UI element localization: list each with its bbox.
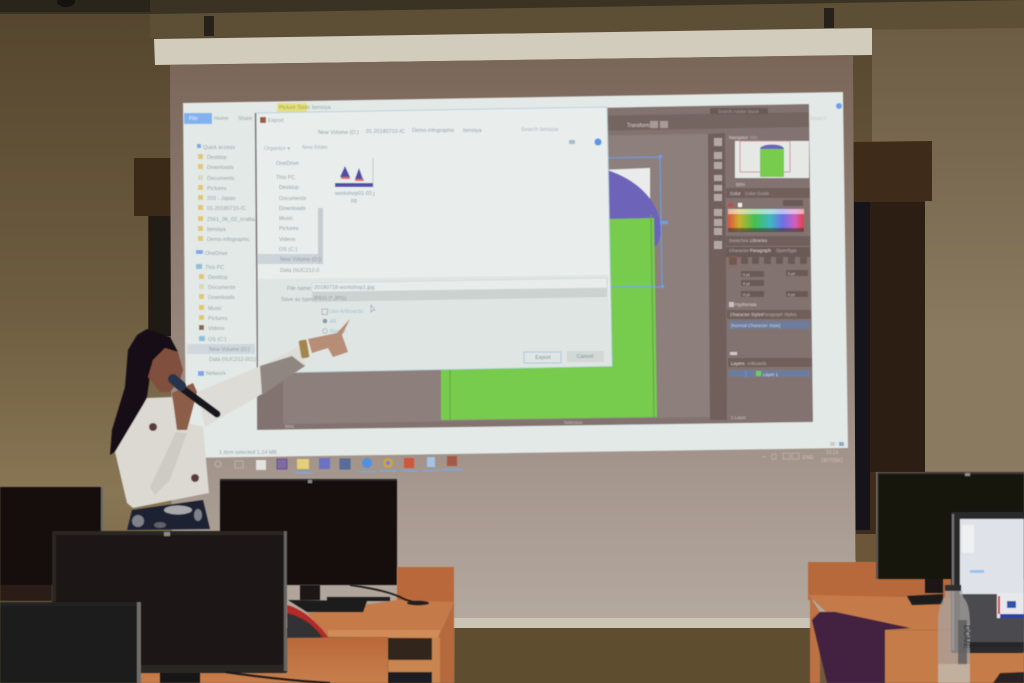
purple circle shape	[600, 168, 661, 246]
illustrator window: Info	[750, 135, 758, 140]
back center monitor	[220, 479, 397, 585]
microphone	[183, 389, 217, 414]
explorer window sidebar: Documents	[208, 285, 236, 291]
navigator panel	[735, 141, 809, 178]
sleeve arm	[197, 346, 306, 427]
export dialog: Pictures	[279, 226, 299, 232]
exported file thumbnail	[335, 158, 373, 187]
illustrator window: Swatches	[729, 238, 749, 243]
export dialog: 20180718-workshop1.jpg	[314, 285, 375, 291]
export dialog: Music	[279, 216, 293, 222]
front left monitor	[0, 602, 141, 683]
projected desktop	[183, 92, 848, 458]
illustrator window: 0 pt	[788, 292, 796, 297]
skirt	[127, 500, 210, 530]
purple chair	[812, 612, 910, 683]
projector screen housing	[154, 28, 872, 65]
illustrator window: 0 pt	[788, 271, 796, 276]
explorer window sidebar: Data (\\UC212-001)	[209, 357, 256, 363]
long dark hair	[110, 329, 178, 455]
explorer window sidebar: Network	[206, 371, 226, 377]
illustrator window: 50%	[736, 182, 745, 187]
right curtain	[853, 141, 932, 562]
explorer window sidebar: Desktop	[207, 155, 227, 161]
face	[148, 348, 183, 392]
export dialog: pg	[351, 198, 357, 204]
illustrator window: Character	[729, 248, 749, 253]
explorer window sidebar: Search	[810, 116, 827, 122]
export dialog: Cancel	[577, 354, 593, 360]
illustrator window: Libraries	[750, 238, 768, 243]
explorer window sidebar: bensiya	[207, 227, 226, 233]
red chair	[287, 605, 328, 638]
export dialog: Videos	[279, 237, 296, 243]
monitor stand, keyboard and cable	[288, 585, 429, 612]
front partition desk	[140, 637, 388, 683]
left desk with orange panel	[307, 567, 454, 683]
artboard	[600, 168, 650, 225]
tool column icons	[714, 138, 722, 249]
raised hand	[172, 383, 197, 430]
export dialog: Export	[268, 118, 284, 124]
explorer window sidebar: Downloads	[208, 295, 235, 301]
export dialog: bensiya	[463, 128, 482, 134]
explorer window sidebar: OneDrive	[205, 251, 228, 257]
window taskbar icons: 18/7/2561	[821, 458, 843, 464]
export dialog: Downloads	[279, 206, 306, 212]
front right monitor showing screen share	[951, 512, 1024, 653]
export dialog: Demo-infographic	[412, 128, 455, 134]
character styles panel	[727, 310, 811, 319]
explorer window sidebar: bensiya	[312, 105, 331, 111]
embroidery	[149, 423, 157, 431]
export dialog: JPEG (*.JPG)	[313, 296, 346, 302]
illustrator window: 0 pt	[743, 292, 751, 297]
back right monitor	[876, 472, 1024, 605]
explorer window sidebar: Home	[214, 116, 228, 122]
illustrator window: Color Guide	[745, 191, 770, 196]
green rectangle	[441, 218, 657, 420]
illustrator window: [Normal Character Style]	[731, 323, 780, 328]
illustrator window: 0 pt	[743, 272, 751, 277]
export dialog: Documents	[279, 196, 307, 202]
explorer window sidebar	[184, 103, 844, 456]
explorer window sidebar: 1 item selected 1.14 MB	[219, 450, 277, 456]
export dialog	[256, 107, 612, 373]
back left monitor	[0, 487, 103, 601]
illustrator window: Color	[730, 191, 741, 196]
export dialog: Use Artboards	[329, 309, 363, 315]
export dialog: OS (C:)	[279, 247, 297, 253]
export dialog: Search bensiya	[521, 127, 558, 133]
explorer window sidebar: File	[189, 116, 198, 122]
export dialog: Save as type:	[281, 297, 314, 303]
export dialog: All	[330, 319, 336, 325]
export dialog: Data (\\UC212-0	[280, 268, 319, 274]
color panel	[726, 188, 810, 198]
export dialog: New folder	[302, 145, 328, 151]
presenter	[110, 319, 350, 530]
illustrator window: Character Styles	[730, 312, 764, 317]
illustrator window: Search Adobe Stock	[718, 109, 760, 114]
water bottle: DOME	[962, 625, 971, 649]
illustrator window: 1 Layer	[731, 415, 747, 420]
explorer window sidebar: Videos	[208, 326, 225, 332]
explorer window sidebar: 203 - Japan	[207, 196, 235, 202]
illustrator window: Paragraph Styles	[762, 312, 797, 317]
export dialog: Export	[535, 355, 551, 361]
explorer window sidebar: Share	[238, 116, 252, 122]
hand pointing	[308, 319, 350, 357]
selection box	[605, 157, 662, 287]
explorer window sidebar: Desktop	[208, 275, 228, 281]
front right partition	[885, 630, 1024, 683]
illustrator window: Artboards	[747, 361, 767, 366]
front center monitor	[52, 531, 330, 683]
window taskbar icons: ENG	[803, 455, 814, 461]
projection screen surface	[170, 55, 856, 628]
layers panel	[728, 358, 812, 367]
illustrator window: Layer 1	[763, 372, 779, 377]
illustrator window: 0 pt	[743, 281, 751, 286]
export dialog: OneDrive	[276, 161, 299, 167]
water bottle	[938, 585, 971, 683]
export dialog: Desktop	[279, 185, 299, 191]
explorer window sidebar: Quick access	[203, 145, 235, 151]
export dialog: New Volume (D:)	[280, 257, 321, 263]
export dialog: Range:	[330, 329, 347, 335]
export dialog: New Volume (D:)	[318, 130, 359, 136]
illustrator window: Hyphenate	[735, 302, 757, 307]
explorer window sidebar: 01-20180710-IC	[207, 206, 246, 212]
left curtain	[134, 158, 172, 336]
export dialog: workshop01-02.j	[334, 191, 375, 197]
illustrator window: Paragraph	[750, 248, 772, 253]
window taskbar icons	[215, 450, 843, 473]
export dialog: Organize ▾	[264, 146, 290, 152]
illustrator window: 50%	[285, 424, 294, 429]
export dialog: This PC	[276, 175, 295, 181]
explorer window sidebar: Pictures	[207, 186, 227, 192]
illustrator window	[256, 104, 813, 430]
illustrator window: Navigator	[729, 135, 749, 140]
export dialog: 01-20180710-IC	[366, 129, 405, 135]
toolbar text: Transform	[627, 123, 650, 129]
explorer window sidebar: Music	[208, 306, 222, 312]
explorer window sidebar: Pictures	[208, 316, 228, 322]
explorer window sidebar: Demo-infographic	[207, 237, 250, 243]
explorer window sidebar: Picture Tools	[279, 105, 310, 111]
illustrator window: OpenType	[776, 248, 797, 253]
window taskbar icons: 10:14	[826, 450, 838, 456]
paragraph panel	[726, 236, 810, 246]
explorer window sidebar: Documents	[207, 176, 235, 182]
wall below screen	[455, 628, 811, 683]
explorer window sidebar: This PC	[205, 265, 224, 271]
explorer window sidebar: 2561_06_02_rrrallaum	[207, 217, 262, 223]
right desk back panel	[808, 562, 955, 683]
export dialog: File name:	[287, 286, 312, 292]
explorer window sidebar: Downloads	[207, 165, 234, 171]
explorer window sidebar: New Volume (D:)	[209, 347, 250, 353]
illustrator window: Selection	[564, 420, 583, 425]
white blouse	[115, 397, 209, 508]
explorer window sidebar: OS (C:)	[208, 337, 226, 343]
illustrator window: Layers	[731, 361, 745, 366]
